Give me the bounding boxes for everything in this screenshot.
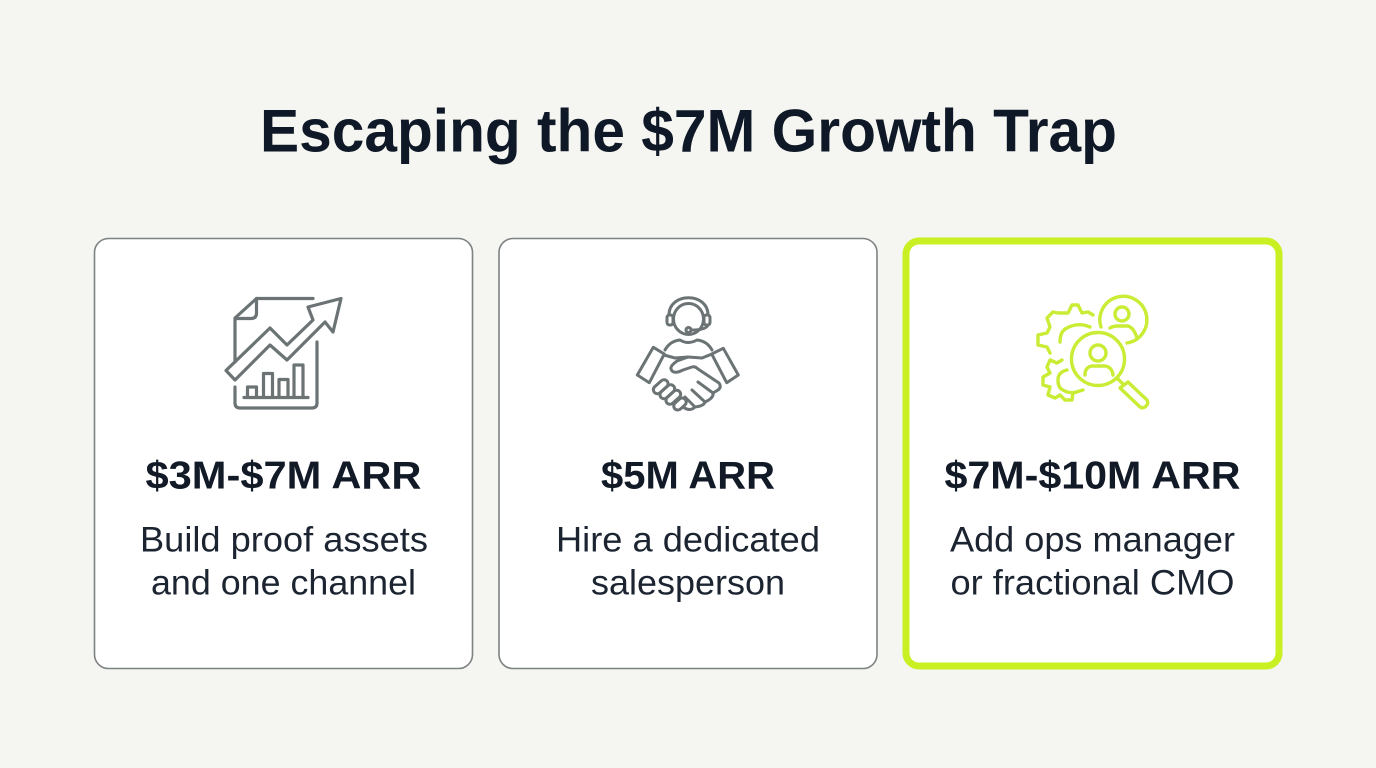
description: salesperson	[591, 562, 785, 602]
heading: $5M ARR	[601, 454, 775, 498]
description: Hire a dedicated	[556, 520, 820, 560]
panel: $5M ARR	[499, 238, 877, 668]
description	[140, 520, 428, 602]
description: Build proof assets	[140, 520, 428, 560]
heading: $7M-$10M ARR	[944, 454, 1241, 498]
heading: $3M-$7M ARR	[146, 454, 422, 498]
panel: $3M-$7M ARR	[94, 238, 472, 668]
description: or fractional CMO	[950, 562, 1234, 602]
description	[556, 520, 820, 602]
description	[950, 520, 1235, 602]
title: Escaping the $7M Growth Trap	[260, 98, 1117, 164]
description: and one channel	[151, 562, 416, 602]
icon: headset agent and handshake	[637, 298, 738, 412]
panel: $7M-$10M ARR (highlighted)	[906, 241, 1279, 666]
icon: growth chart document	[226, 298, 341, 408]
description: Add ops manager	[950, 520, 1235, 560]
icon: gears, people and magnifier	[1038, 296, 1148, 408]
